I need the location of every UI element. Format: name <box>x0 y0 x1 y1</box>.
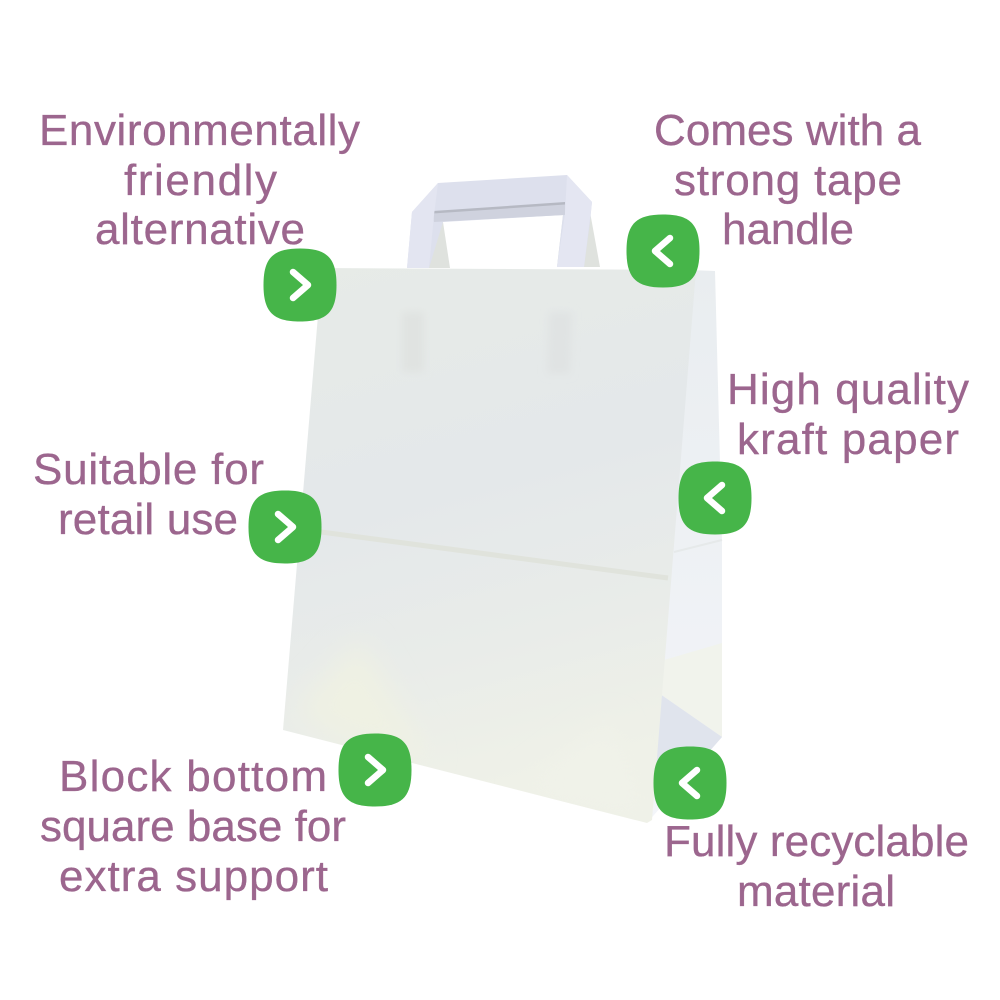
callout: high quality kraft paper: High quality <box>727 365 969 414</box>
bag fold crease <box>306 530 668 578</box>
callout: block bottom square base: square base for <box>40 802 346 851</box>
callout: block bottom square base: extra support <box>59 852 328 901</box>
callout: suitable for retail use <box>33 445 264 544</box>
callout: environmentally friendly alternative: Environmentally <box>39 106 360 155</box>
callout: environmentally friendly alternative: alternative <box>95 205 305 254</box>
side gusset <box>647 270 722 823</box>
callout: fully recyclable material: Fully recyclable <box>664 817 969 866</box>
panel shading <box>295 312 645 815</box>
icon: arrow badge left, bottom right <box>654 746 726 820</box>
icon: arrow badge right, middle left <box>248 490 322 564</box>
bag handle <box>407 175 592 268</box>
callout: suitable for retail use: retail use <box>58 495 238 544</box>
icon: arrow badge right, bottom left <box>338 734 412 806</box>
icon: arrow badge left, middle right <box>678 462 752 534</box>
callout: high quality kraft paper: kraft paper <box>737 415 959 464</box>
paper bag product image <box>283 175 722 823</box>
callout: strong tape handle: handle <box>722 205 854 254</box>
bag back inner handle <box>428 212 600 268</box>
callout: strong tape handle: Comes with a <box>654 106 922 155</box>
callout: high quality kraft paper <box>727 365 969 464</box>
callout: block bottom square base: Block bottom <box>59 752 327 801</box>
callout: block bottom square base <box>40 752 346 901</box>
front panel <box>283 268 696 823</box>
callout: environmentally friendly alternative: friendly <box>124 156 277 205</box>
callout: environmentally friendly alternative <box>39 106 360 254</box>
icon: arrow badge left, top right <box>626 214 700 288</box>
callout: fully recyclable material <box>664 817 969 916</box>
callout: strong tape handle <box>654 106 922 254</box>
callout: suitable for retail use: Suitable for <box>33 445 264 494</box>
icon: arrow badge right, top left <box>264 248 336 322</box>
callout: fully recyclable material: material <box>737 867 895 916</box>
callout: strong tape handle: strong tape <box>674 156 902 205</box>
